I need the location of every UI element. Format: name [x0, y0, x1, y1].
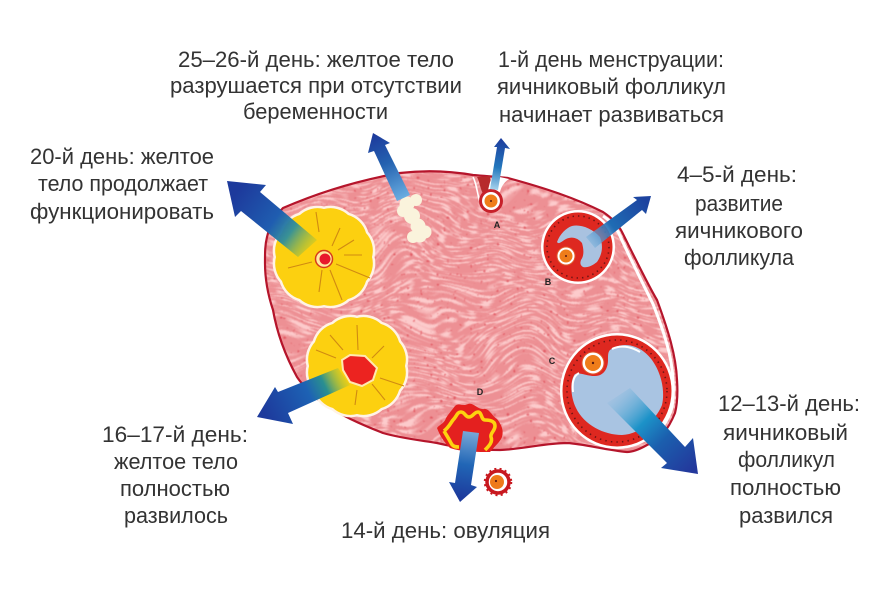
arrow: day 14 — [449, 431, 479, 502]
stage letter B: B — [545, 277, 552, 287]
label: day 4-5 — [675, 162, 803, 270]
label: day 1 — [497, 47, 726, 127]
label: day 12-13: развился — [739, 503, 833, 528]
corpus luteum, day 16-17 — [308, 317, 406, 415]
arrow: day 16-17 — [257, 368, 350, 424]
arrow: day 20 — [227, 181, 317, 257]
label: day 20 — [30, 144, 214, 224]
label: day 1: 1-й день менструации: — [498, 47, 724, 72]
primordial follicle A — [473, 176, 509, 213]
label: day 4-5: 4–5-й день: — [677, 162, 797, 187]
stage letter C: C — [549, 356, 556, 366]
label: day 16-17: развилось — [124, 503, 228, 528]
label: day 20: тело продолжает — [38, 171, 208, 196]
arrow: day 12-13 — [607, 388, 698, 474]
label: day 12-13: яичниковый — [723, 420, 848, 445]
released ovum — [485, 469, 511, 495]
label: day 12-13: фолликул — [738, 447, 835, 472]
corpus luteum, day 20 — [275, 208, 373, 306]
label: day 20: функционировать — [30, 199, 214, 224]
ovary stroma tissue — [255, 165, 685, 460]
label: day 1: начинает развиваться — [499, 102, 724, 127]
stage letter D: D — [477, 387, 484, 397]
ovary outer wall — [265, 171, 677, 452]
mature follicle C — [560, 333, 674, 449]
stage letter A: A — [494, 220, 501, 230]
label: day 12-13: полностью — [730, 475, 841, 500]
label: day 16-17 — [102, 422, 248, 528]
ovary cross-section — [255, 165, 685, 460]
arrow: day 25-26 — [368, 133, 410, 201]
label: day 20: 20-й день: желтое — [30, 144, 214, 169]
label: day 4-5: развитие — [695, 191, 783, 216]
label: day 25-26: беременности — [243, 99, 388, 124]
label: day 25-26: 25–26-й день: желтое тело — [178, 47, 454, 72]
label: day 16-17: желтое тело — [114, 449, 238, 474]
ruptured follicle, ovulation — [437, 404, 503, 452]
degrading corpus albicans, day 25-26 — [397, 194, 432, 243]
label: day 12-13 — [718, 391, 860, 528]
arrow: day 4-5 — [586, 196, 651, 248]
label: day 16-17: 16–17-й день: — [102, 422, 248, 447]
label: day 25-26 — [170, 47, 462, 124]
label: day 14: 14-й день: овуляция — [341, 518, 550, 543]
label: day 16-17: полностью — [120, 476, 230, 501]
label: day 12-13: 12–13-й день: — [718, 391, 860, 416]
label: day 4-5: фолликула — [684, 245, 795, 270]
arrow: day 1 — [490, 138, 510, 190]
developing follicle B — [541, 210, 615, 284]
label: day 4-5: яичникового — [675, 218, 803, 243]
label: day 1: яичниковый фолликул — [497, 74, 726, 99]
label: day 25-26: разрушается при отсутствии — [170, 73, 462, 98]
